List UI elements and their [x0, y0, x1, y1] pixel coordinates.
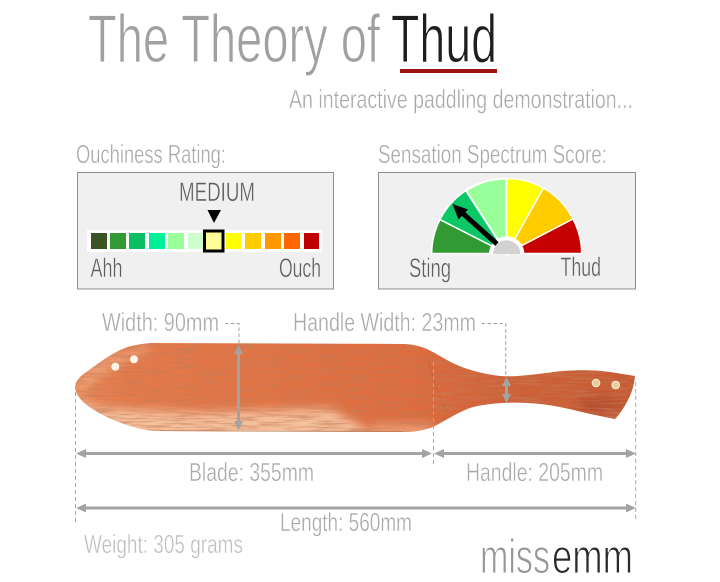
guide line: blade end: [432, 362, 434, 465]
heading: sensation spectrum score: Sensation Spectrum Score:: [378, 139, 607, 169]
gauge needle: [452, 204, 497, 244]
guide line: right: [635, 382, 637, 522]
rating value: MEDIUM: [179, 177, 255, 207]
weight label: Weight: 305 grams: [84, 529, 243, 559]
paddle: [75, 343, 635, 432]
heading: ouchiness rating: Ouchiness Rating:: [76, 139, 226, 169]
gauge label: sting: Sting: [409, 253, 451, 283]
title: Thud: [391, 1, 497, 77]
paddle: light wood band: [78, 396, 374, 432]
scale label: ahh: Ahh: [90, 253, 122, 283]
paddle: lower edge line: [160, 431, 403, 432]
paddle: lower right tint: [372, 424, 432, 436]
scale label: ouch: Ouch: [279, 253, 321, 283]
guide line: left: [74, 392, 76, 523]
logo: missemm: [480, 531, 633, 582]
panel: sensation spectrum: [378, 172, 636, 289]
paddle: handle seam: [428, 360, 447, 413]
rating scale: [87, 230, 322, 252]
width callout: Width: 90mm: [102, 307, 219, 337]
paddle: wood grain: [70, 340, 640, 435]
paddle rivets: blade: [111, 355, 138, 371]
title underline: [400, 69, 497, 73]
paddle: handle shade: [578, 395, 622, 415]
blade dimension arrow: [76, 449, 432, 458]
title: The Theory of: [88, 1, 380, 77]
gauge label: thud: Thud: [560, 252, 601, 282]
handle dimension arrow: [434, 449, 636, 458]
handle width callout: [293, 307, 511, 403]
gauge: [432, 178, 582, 254]
handle label: Handle: 205mm: [466, 457, 603, 487]
rating pointer: [208, 210, 221, 223]
panel: ouchiness rating: [78, 172, 334, 289]
paddle rivets: handle: [592, 379, 620, 389]
selected rating marker: [204, 231, 223, 251]
width callout: [102, 307, 243, 430]
length dimension arrow: [76, 504, 636, 512]
length label: Length: 560mm: [280, 507, 412, 537]
paddle: top rim highlight: [74, 344, 150, 392]
blade label: Blade: 355mm: [189, 457, 314, 487]
handle width callout: Handle Width: 23mm: [293, 307, 476, 337]
